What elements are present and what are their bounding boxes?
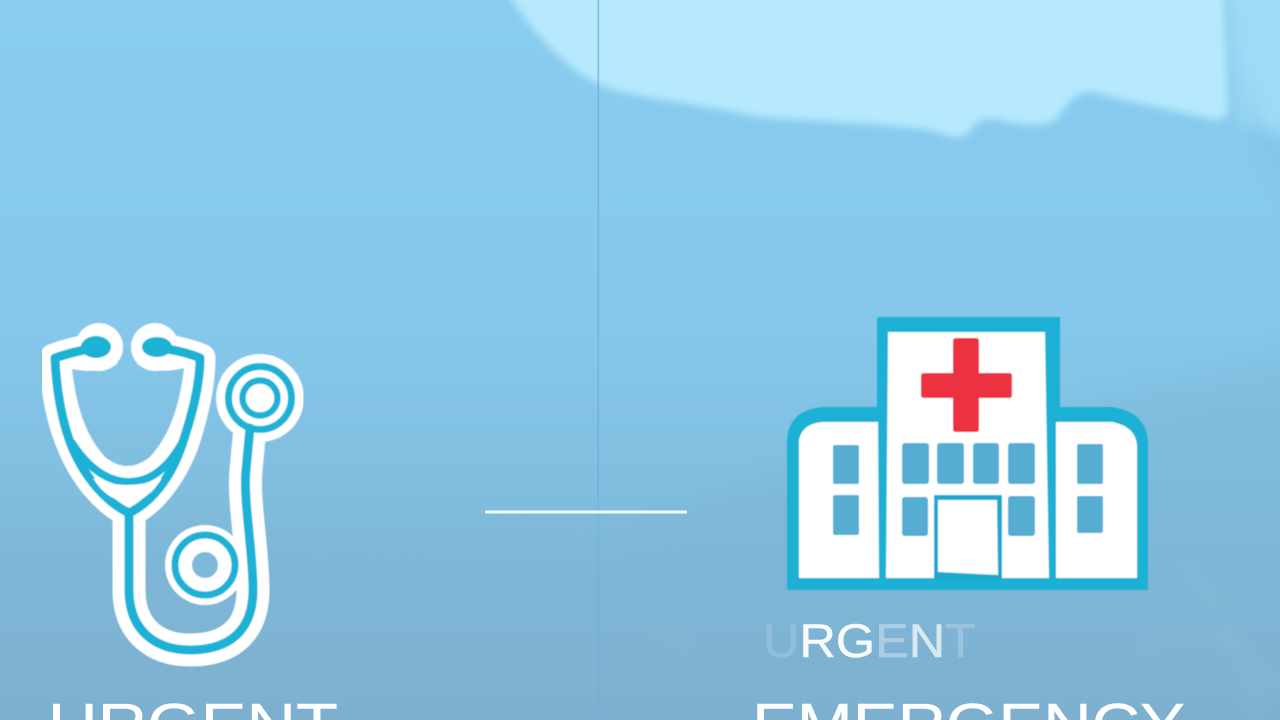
red cross (921, 338, 1012, 432)
icon: stethoscope (54, 300, 292, 650)
animated label: URGENT (right): URGENT (763, 614, 976, 667)
chest piece centre (192, 552, 218, 578)
hospital blue outline (787, 317, 1148, 590)
left wing (799, 422, 879, 578)
right wing (1056, 422, 1137, 578)
windows (833, 443, 1103, 536)
background: pale sky shape (500, 0, 1228, 137)
stethoscope white silhouette (54, 347, 289, 650)
central block (886, 332, 1049, 578)
door (934, 495, 1002, 580)
left ear white tip (75, 323, 123, 371)
stethoscope earpieces (81, 336, 172, 358)
right ear white tip (131, 323, 179, 371)
gap inside the headset (72, 300, 184, 466)
connector line (485, 510, 687, 514)
stethoscope blue tubing (55, 347, 292, 650)
icon: hospital (787, 317, 1148, 590)
vertical divider (598, 0, 599, 720)
stethoscope yoke crescent (93, 478, 162, 502)
